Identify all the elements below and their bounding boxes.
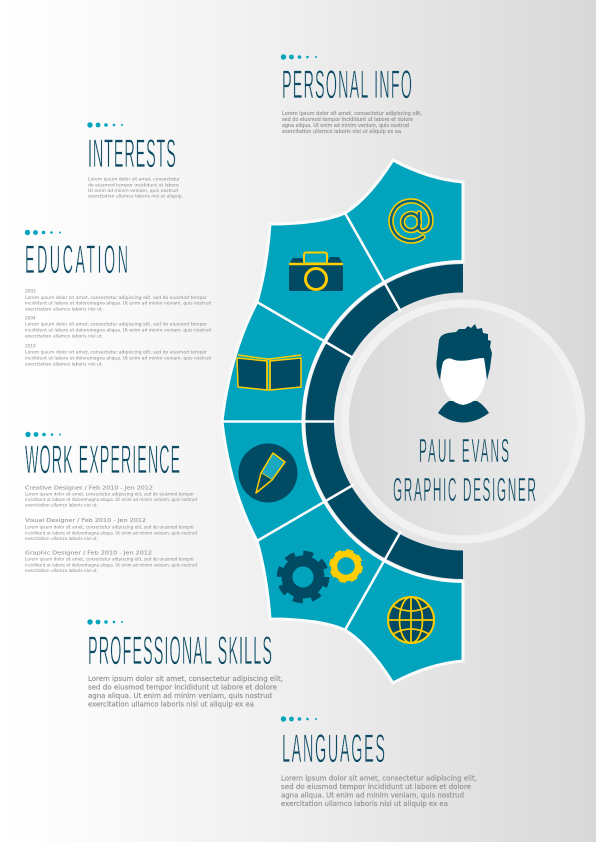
dots [25,230,61,235]
section: professional skills [87,619,283,708]
job entries: exercitation ullamco laboris nisi ut. [25,536,98,541]
panel: teal segmented fan [222,160,463,683]
body text: Lorem ipsum dolor sit amet, consectetur adipiscing elit, [282,111,422,117]
section: interests [87,122,183,198]
job entries: incididunt ut labore et doloremagna aliqua. Ut enim ad minim veniam, quis nostrud [25,562,197,568]
dots [25,432,61,437]
icon: person avatar [436,324,492,422]
job entries: Creative Designer / Feb 2010 - Jen 2012 [25,486,153,492]
education entries: Lorem ipsum dolor sit amet, consectetur adipiscing elit, sed do eiusmod tempor [25,322,207,326]
job entries: Lorem ipsum dolor sit amet, consectetur adipiscing elit, sed do eiusmod tempor [25,524,194,530]
education entries: incididunt ut labore et doloremagna aliqua. Ut enim ad minim veniam, quis nostrud [25,300,211,306]
body text: sed do eiusmod tempor incididunt ut labore et dolore [281,783,471,791]
icon: gears [280,551,361,600]
heading: PROFESSIONAL SKILLS [88,629,272,673]
body text: agna aliqua. Ut enim ad minim veniam, quis nostrud [282,123,409,129]
education entries: Lorem ipsum dolor sit amet, consectetur adipiscing elit, sed do eiusmod tempor [25,350,207,354]
education entries: 2004 [25,316,36,320]
section: languages [281,716,477,808]
heading: LANGUAGES [282,727,385,771]
body text [281,774,477,808]
icon: pencil badge [238,444,298,502]
panel: profile disc [341,300,585,544]
body text: Ut enim ad minim veniam, quis nostrud [88,188,178,193]
body text: agna aliqua. Ut enim ad minim veniam, quis nostrud [88,692,272,700]
heading: PERSONAL INFO [282,63,412,107]
job title: GRAPHIC DESIGNER [393,473,536,509]
education entries: 2003 [25,288,36,294]
education entries: exercitation ullamco laboris nisi ut. [25,362,103,366]
heading: INTERESTS [88,132,176,176]
dots [87,122,123,128]
body text: do eiusmod tempor incididunt ut labore [88,182,179,188]
job entries: Visual Designer / Feb 2010 - Jen 2012 [25,518,146,524]
dots [281,716,317,722]
education entries: incididunt ut labore et doloremagna aliqua. Ut enim ad minim veniam, quis nostrud [25,356,211,360]
education entries [25,288,211,366]
heading: EDUCATION [25,238,128,282]
icon: camera [289,252,343,291]
section: personal info [281,54,422,135]
job entries: incididunt ut labore et doloremagna aliqua. Ut enim ad minim veniam, quis nostrud [25,530,197,536]
body text: Lorem ipsum dolor sit amet, consectetur adipiscing elit, [281,774,477,782]
job entries: incididunt ut labore et doloremagna aliqua. Ut enim ad minim veniam, quis nostrud [25,497,197,502]
job entries: exercitation ullamco laboris nisi ut. [25,568,98,573]
body text [88,675,283,708]
body text: Lorem ipsum dolor sit amet, consectetur adipiscing elit, [88,675,283,683]
body text: agna aliqua. Ut enim ad minim veniam, quis nostrud [281,792,464,800]
name: PAUL EVANS [419,434,509,470]
job entries: Lorem ipsum dolor sit amet, consectetur adipiscing elit, sed do eiusmod tempor [25,492,194,496]
body text [282,111,422,135]
education entries: incididunt ut labore et doloremagna aliqua. Ut enim ad minim veniam, quis nostrud [25,328,211,332]
dots [281,54,317,60]
body text: sed do eiusmod tempor incididunt ut labore et dolore [88,684,277,692]
body text: exercitation ullamco laboris nisi ut aliquip. [88,194,183,198]
dots [87,619,123,625]
job entries [25,486,197,573]
heading: WORK EXPERIENCE [25,438,180,482]
body text: exercitation ullamco laboris nisi ut aliquip ex ea [282,129,401,135]
icon: open book [237,355,301,390]
job entries: Lorem ipsum dolor sit amet, consectetur adipiscing elit, sed do eiusmod tempor [25,556,194,562]
panel: dark inner ring [222,213,463,630]
section: work experience [25,432,197,573]
education entries: Lorem ipsum dolor sit amet, consectetur adipiscing elit, sed do eiusmod tempor [25,295,207,300]
body text: exercitation ullamco laboris nisi ut aliquip ex ea [88,700,254,708]
body text: sed do eiusmod tempor incididunt ut labore et dolore [282,117,413,123]
education entries: exercitation ullamco laboris nisi ut. [25,306,103,312]
body text: Lorem ipsum dolor sit amet, consectetur [88,176,180,182]
job entries: exercitation ullamco laboris nisi ut. [25,502,98,508]
section: education [25,230,211,366]
body text: exercitation ullamco laboris nisi ut aliquip ex ea [281,800,448,808]
education entries: 2010 [25,344,36,348]
icon: globe [388,597,434,643]
education entries: exercitation ullamco laboris nisi ut. [25,334,103,338]
icon: at sign [391,201,431,241]
body text [88,176,183,198]
job entries: Graphic Designer / Feb 2010 - Jen 2012 [25,550,152,556]
